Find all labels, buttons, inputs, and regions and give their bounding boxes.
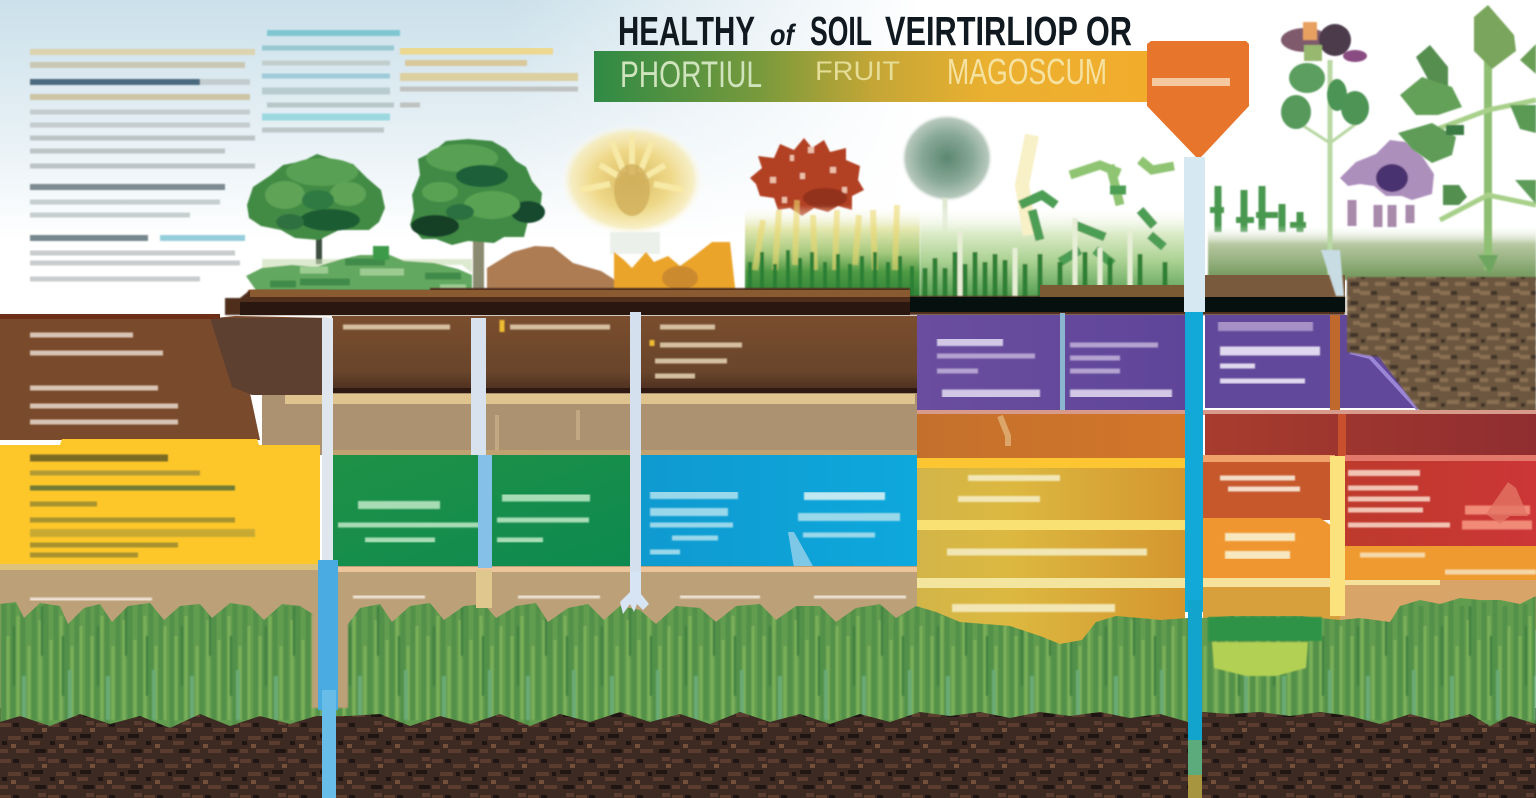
panel: middle intro text <box>262 33 400 130</box>
panel: orange-red rows <box>1203 455 1340 645</box>
tan subsoil band <box>262 393 920 455</box>
mixed crop plants <box>920 135 1185 300</box>
yellow shrub <box>560 124 704 254</box>
low green shrub <box>246 246 472 299</box>
banner: PHORTIUL <box>620 54 762 95</box>
panel: yellow left <box>0 439 320 565</box>
pipe: third with fork <box>620 312 649 614</box>
banner <box>594 51 1154 102</box>
title: HEALTHY <box>618 8 755 54</box>
panel: green <box>332 455 640 568</box>
tree 1 <box>247 154 385 264</box>
panel: brown topsoil main <box>332 316 917 393</box>
panel: left intro text <box>30 52 255 279</box>
title: VEIRTIRLIOP OR <box>885 8 1132 54</box>
panel: orange layer <box>917 414 1185 461</box>
icon: red marker <box>1486 482 1528 524</box>
meadow band right <box>1208 225 1536 280</box>
meadow grasses centre <box>745 200 920 300</box>
panel: brown topsoil left <box>0 314 332 440</box>
panel: red rows <box>1340 455 1536 630</box>
panel: purple left <box>917 313 1185 415</box>
pipe: second <box>471 318 492 608</box>
red shrub <box>750 138 864 216</box>
grey-green round tree <box>901 114 993 278</box>
panel: textured soil right <box>1347 277 1536 413</box>
title: SOIL <box>810 8 872 54</box>
band: pink rule <box>917 410 1536 415</box>
small green plants right <box>1210 186 1306 232</box>
orange mound <box>614 242 736 296</box>
icon: blue triangle marker <box>788 532 814 568</box>
tall leafy plant <box>1398 5 1536 275</box>
grass sign <box>1208 617 1322 676</box>
orange shield marker <box>1147 41 1249 158</box>
panel: red layer <box>1205 414 1536 458</box>
plant with dark flower <box>1281 22 1369 275</box>
panel: right intro text <box>400 51 578 105</box>
sky background <box>0 0 920 240</box>
soil base <box>0 708 1536 798</box>
banner: MAGOSCUM <box>947 51 1107 92</box>
tree 2 <box>410 139 545 300</box>
panel: golden rows <box>917 458 1185 650</box>
pipe: left <box>318 318 338 798</box>
panel: blue <box>640 455 918 568</box>
topsoil band and ridge <box>225 275 1345 315</box>
tan row under panels <box>0 564 920 726</box>
banner: FRUIT <box>815 56 900 86</box>
panel: purple right <box>1205 315 1419 415</box>
title: of <box>770 19 797 52</box>
pipe: yellow vertical <box>1330 456 1345 616</box>
grass layer <box>0 596 1536 728</box>
purple flower <box>1340 140 1434 227</box>
pipe: main centre <box>1184 157 1344 798</box>
brown mound <box>487 246 633 296</box>
title <box>618 8 1132 54</box>
tan gap beside left pipe <box>312 600 348 708</box>
